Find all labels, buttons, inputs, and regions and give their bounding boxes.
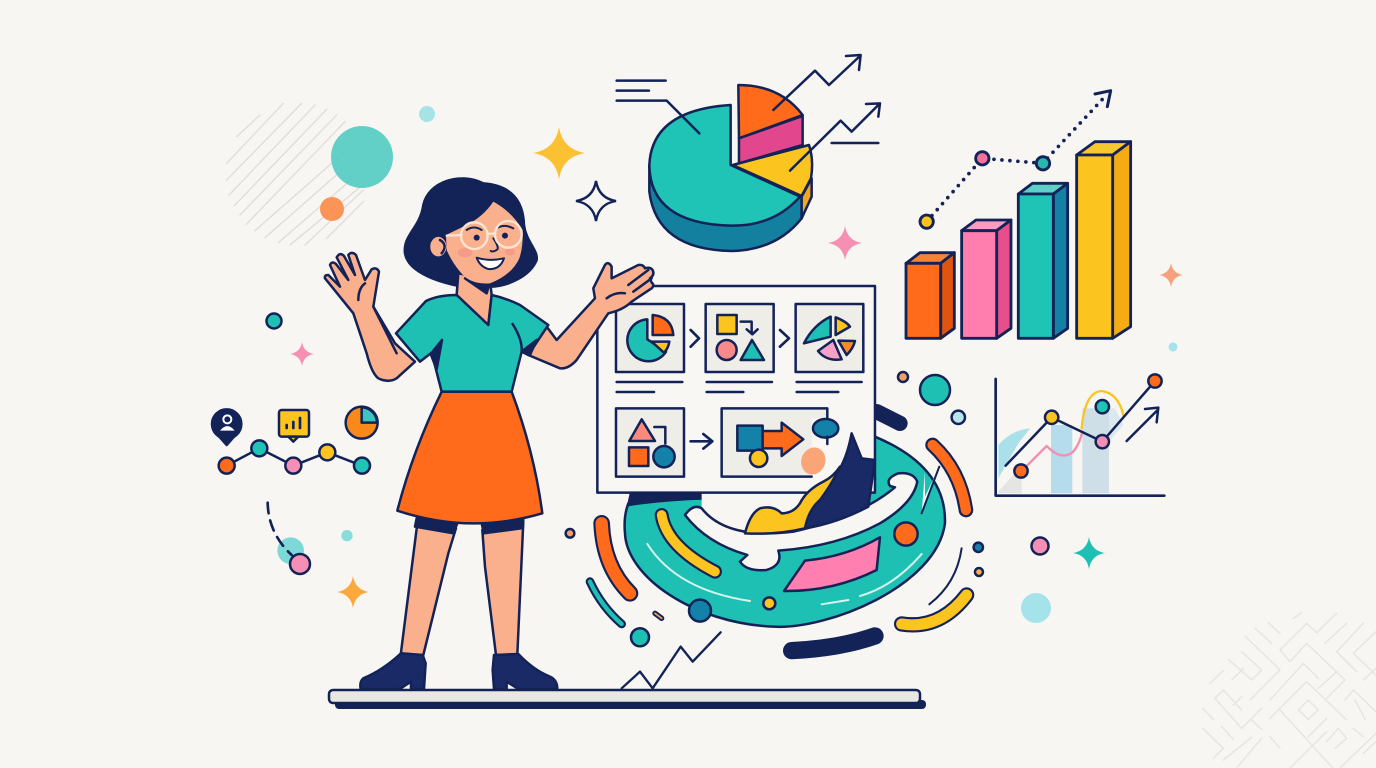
ear	[429, 236, 448, 258]
orange capsule right	[933, 445, 966, 510]
pink sparkle	[828, 226, 862, 260]
teal circle	[331, 126, 393, 188]
small teal dot	[341, 530, 353, 541]
face	[446, 202, 523, 284]
hatched circle decoration	[227, 103, 368, 245]
teal body	[625, 437, 945, 627]
yellow capsule on ring	[662, 515, 715, 572]
light blue circle	[1021, 593, 1051, 623]
chevrons	[691, 330, 789, 347]
yellow slice	[733, 145, 812, 196]
axes	[996, 379, 1164, 496]
boots	[360, 653, 557, 689]
orange sparkle	[337, 576, 369, 608]
arrow between cards	[691, 434, 712, 449]
pink bar	[962, 220, 1011, 338]
pie teal slice	[649, 105, 800, 226]
pie chart	[617, 55, 880, 251]
hair	[405, 178, 537, 287]
pink slice	[739, 116, 803, 163]
background shapes	[998, 408, 1123, 493]
small tan capsule	[655, 613, 662, 618]
trend arrows and label lines	[617, 55, 880, 171]
orange bar	[906, 253, 954, 338]
trend arrowhead	[1095, 91, 1111, 107]
main line	[1006, 381, 1155, 466]
skirt	[397, 392, 542, 523]
right arm and hand	[528, 263, 653, 368]
blue dot	[689, 600, 711, 622]
pink node	[290, 554, 310, 574]
navy band	[628, 490, 707, 505]
chain nodes	[219, 440, 370, 474]
navy capsule top right	[877, 412, 900, 423]
overflow shapes	[745, 433, 875, 534]
peach sparkle	[1159, 263, 1183, 287]
person pin icon	[212, 409, 241, 445]
pink panel	[784, 537, 880, 591]
left icon chain	[212, 407, 378, 574]
slit line	[922, 467, 939, 513]
teal bubble	[920, 375, 950, 405]
light blue dot	[419, 106, 435, 122]
neck shadow	[465, 278, 490, 293]
trend nodes	[920, 152, 1050, 228]
orange dot	[894, 522, 918, 546]
card: shapes	[706, 304, 774, 372]
mouth	[477, 258, 504, 269]
small blue dot	[1168, 342, 1178, 352]
pink ring	[1032, 538, 1048, 554]
yellow bar	[1077, 142, 1131, 338]
neck	[457, 273, 492, 325]
slit	[922, 467, 939, 513]
pink sparkle left	[290, 342, 314, 366]
line nodes	[1014, 374, 1162, 478]
light teal circle	[277, 537, 304, 564]
platform shadow	[335, 700, 926, 709]
swirl data shape	[566, 411, 983, 688]
orange circle	[320, 197, 344, 221]
thin arc	[929, 548, 962, 604]
maze pattern corner	[1203, 613, 1376, 768]
shirt fold	[513, 324, 522, 352]
glasses	[447, 221, 522, 249]
brows	[467, 226, 513, 230]
yellow side wall	[802, 178, 812, 218]
left hand details	[358, 283, 397, 353]
pink curve	[1022, 432, 1082, 471]
light blue ring	[952, 411, 965, 424]
tan small dot	[975, 568, 983, 576]
small tan ring	[898, 372, 908, 382]
teal sparkle	[1073, 537, 1105, 569]
line chart	[996, 374, 1164, 496]
teal node	[266, 314, 282, 328]
shirt shadows	[431, 340, 537, 369]
presenter	[360, 392, 557, 689]
dashed arc	[268, 503, 292, 555]
navy flow	[805, 433, 875, 528]
3D bar chart	[906, 91, 1131, 338]
yellow capsule right	[902, 595, 967, 625]
left arm and hand	[325, 253, 415, 381]
open bowl	[702, 490, 870, 533]
white band	[685, 473, 917, 570]
teal bar	[1018, 183, 1068, 338]
presenter upper body	[325, 178, 653, 392]
shirt	[396, 295, 548, 392]
card: split pieces	[796, 304, 863, 372]
panel frame	[597, 286, 875, 493]
yellow flow	[745, 467, 843, 534]
yellow dot	[763, 597, 775, 609]
mini pie icon	[346, 407, 378, 439]
chat chart icon	[279, 410, 309, 442]
floor platform	[329, 690, 926, 709]
zigzag line	[622, 632, 721, 688]
card: result	[722, 408, 838, 478]
platform top	[329, 690, 920, 703]
right hand details	[607, 270, 652, 298]
outlined sparkle	[576, 181, 616, 221]
tan ring left	[566, 529, 574, 538]
highlight dashes	[647, 544, 922, 604]
dotted trend line	[927, 98, 1103, 222]
yellow capsule fill	[662, 515, 715, 572]
legs	[401, 522, 523, 655]
text lines	[617, 382, 862, 392]
presentation panel	[597, 286, 875, 493]
pie side wall	[649, 165, 802, 251]
yellow curve	[1082, 391, 1123, 428]
teal capsule left	[590, 582, 622, 624]
node chain	[227, 448, 362, 466]
orange capsule left	[602, 523, 630, 593]
shorts	[415, 518, 523, 533]
blue small dot	[974, 543, 983, 552]
orange slice	[738, 85, 803, 138]
card: grouped shapes	[616, 408, 684, 477]
ear detail	[440, 240, 445, 253]
blush	[458, 248, 515, 257]
nose	[491, 238, 498, 251]
yellow sparkle	[533, 127, 585, 179]
teal dot bottom	[631, 628, 649, 646]
small arrow	[1127, 408, 1158, 441]
eyes	[474, 233, 508, 241]
card: pie	[616, 304, 684, 372]
navy capsule bottom	[792, 636, 875, 651]
